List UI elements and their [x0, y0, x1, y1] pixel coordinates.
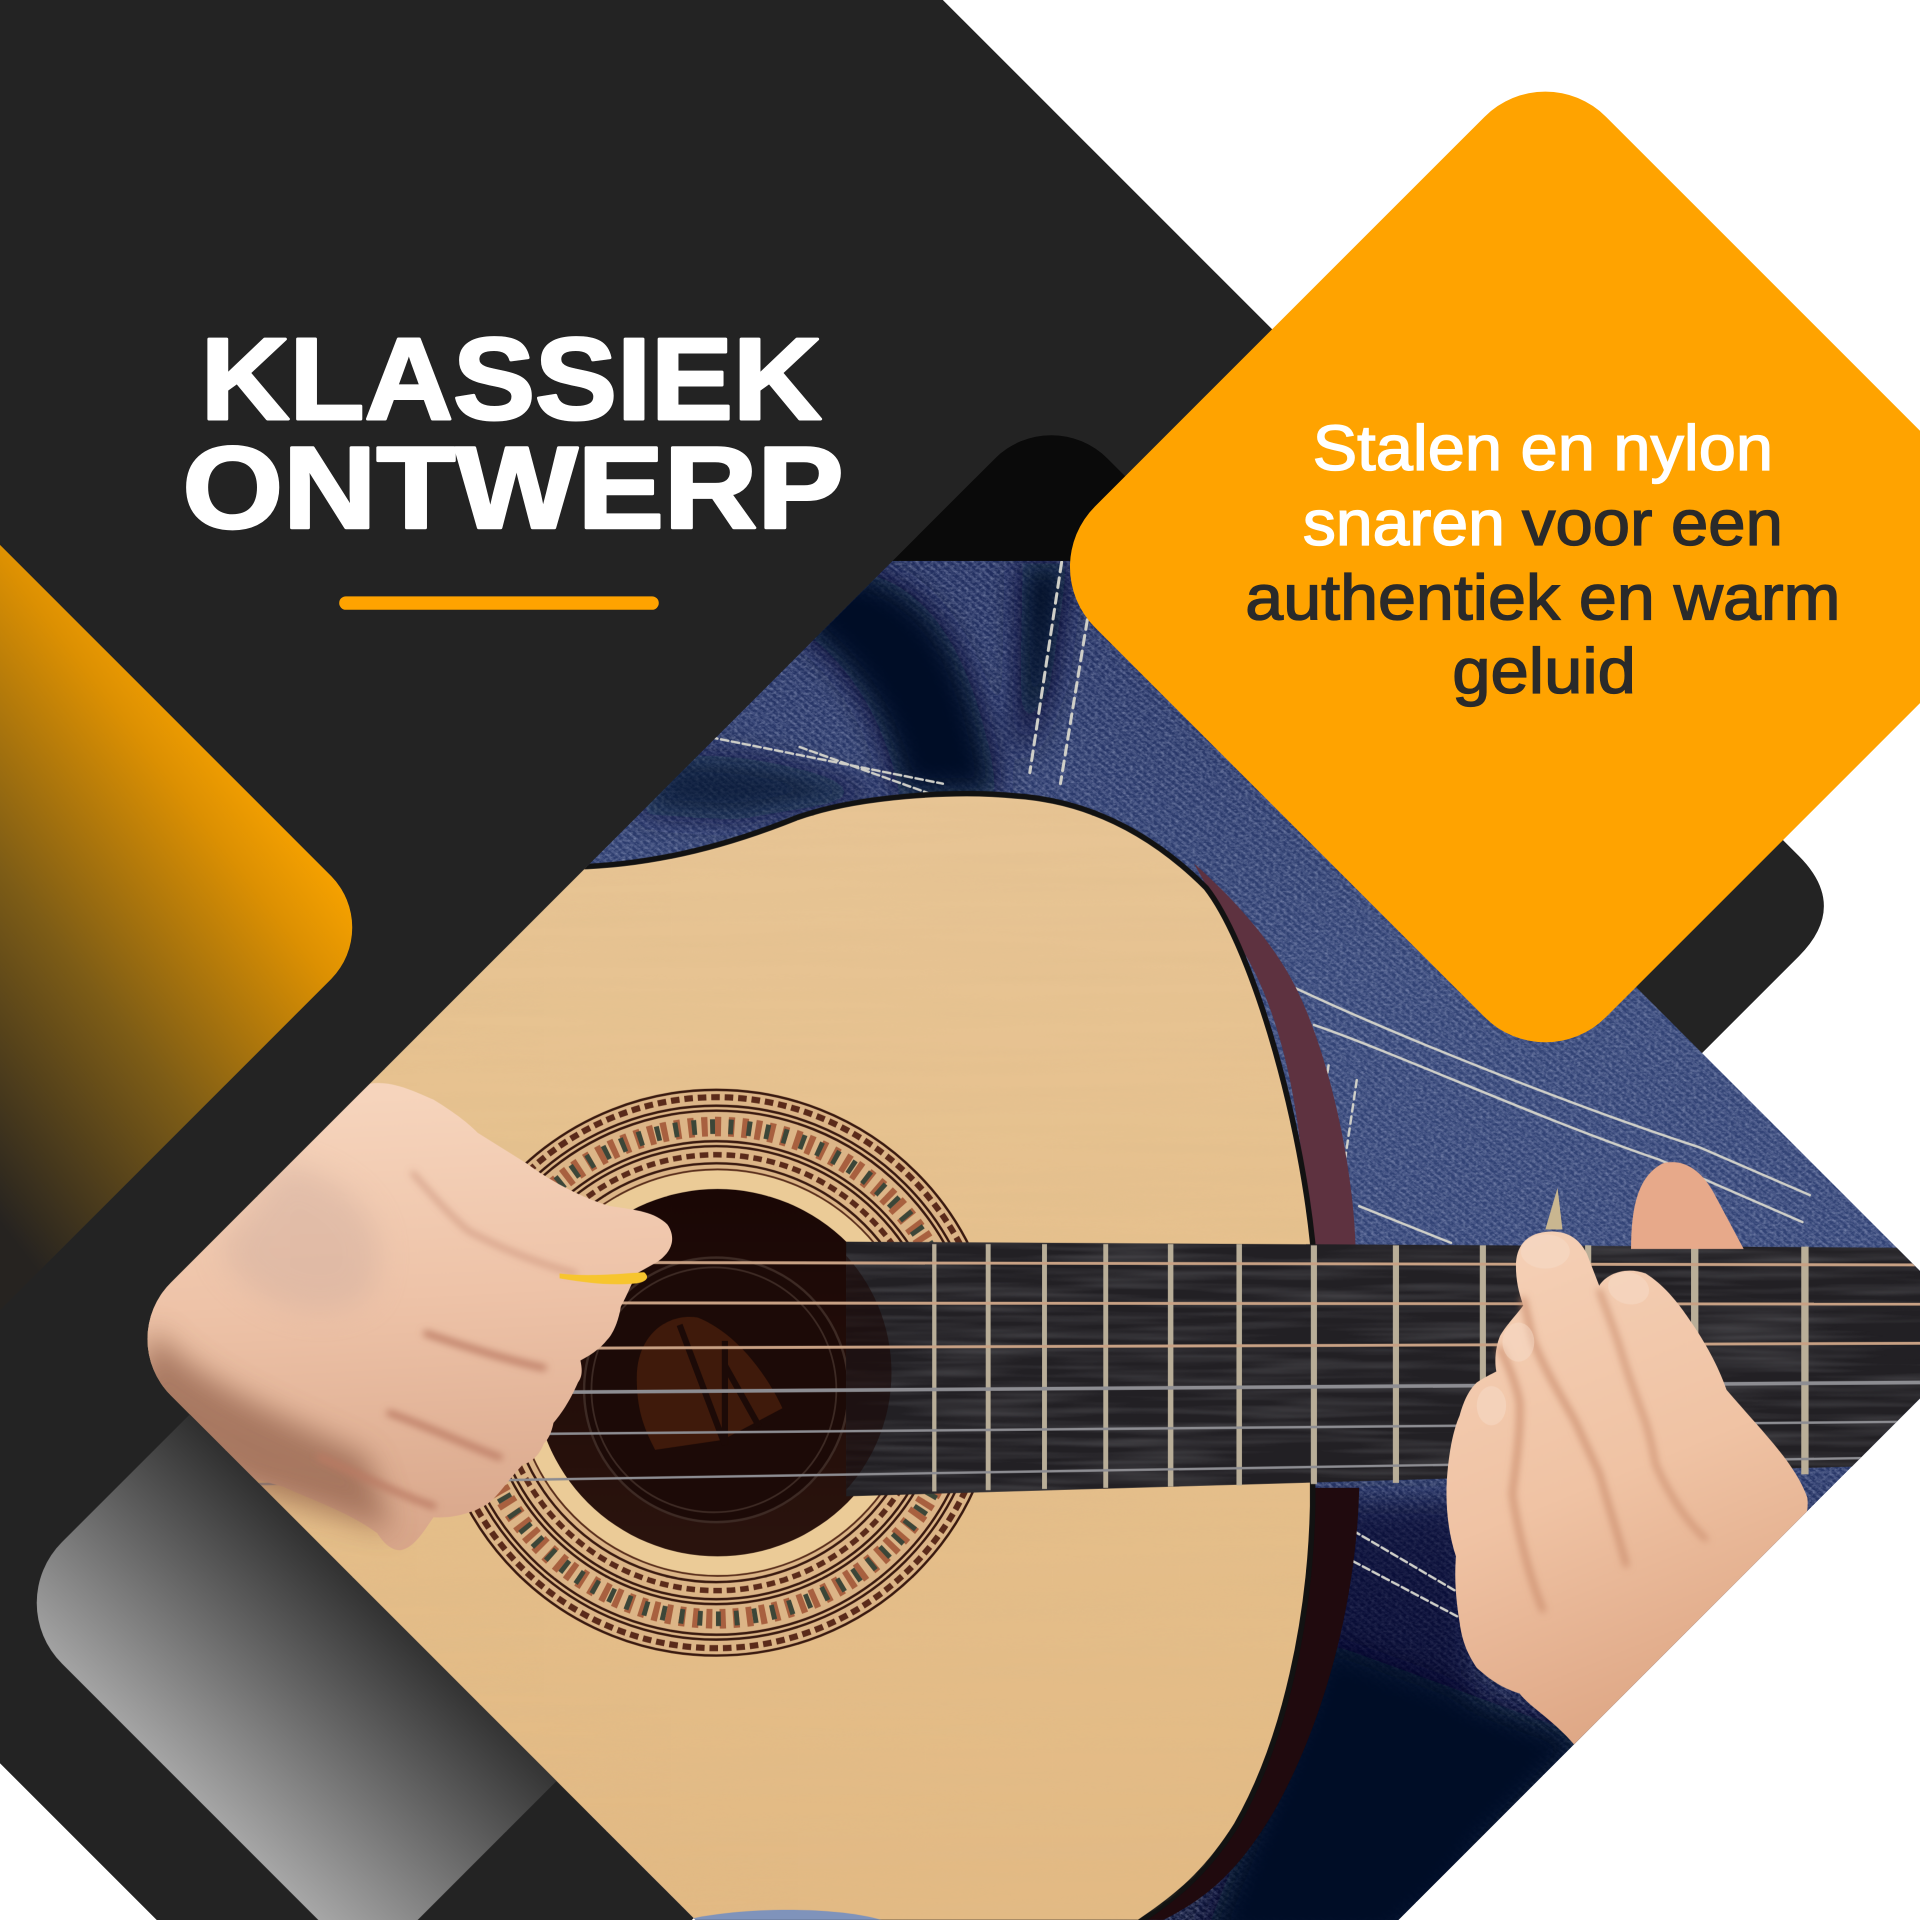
- fretboard: [846, 1242, 1920, 1496]
- fretting hand: [1446, 1162, 1808, 1751]
- grey gradient diamond: [37, 1414, 557, 1920]
- guitar body top: [73, 794, 1313, 1920]
- callout text: authentiek en warm: [1245, 563, 1840, 634]
- orange gradient diamond left: [0, 545, 352, 1310]
- denim weave: [588, 561, 1920, 1920]
- guitar side lower: [1102, 1488, 1359, 1920]
- title underline: [339, 596, 659, 610]
- finger creases: [320, 1173, 576, 1506]
- thumb: [1631, 1162, 1744, 1249]
- orange callout panel: [1034, 56, 1920, 1078]
- fretboard grain: [846, 1242, 1920, 1496]
- fingernails: [1477, 1234, 1653, 1425]
- denim folds: [637, 563, 1592, 1920]
- rosette: [469, 1088, 974, 1657]
- hand shape: [98, 1083, 672, 1550]
- denim below guitar: [686, 1910, 882, 1920]
- denim jacket: [588, 561, 1920, 1920]
- black apex of photo frame: [892, 435, 1125, 561]
- dark background panel: [0, 0, 1371, 1920]
- title: KLASSIEK: [201, 314, 822, 444]
- picking hand: [98, 1083, 672, 1550]
- title: ONTWERP: [182, 423, 844, 553]
- callout text: Stalen en nylon: [1313, 413, 1773, 484]
- strings: [257, 1262, 1920, 1484]
- callout text: snaren: [1303, 488, 1505, 559]
- soundhole seen through fretboard: [544, 1199, 891, 1547]
- wood grain: [1152, 1852, 1214, 1911]
- callout text: voor een: [1522, 488, 1783, 559]
- jacket thread: [1545, 1188, 1562, 1229]
- hand mottling: [220, 1163, 378, 1311]
- wrist shadow: [122, 1329, 392, 1531]
- denim stitching: [710, 562, 1810, 1616]
- pick: [560, 1272, 647, 1284]
- hand shape: [1446, 1231, 1808, 1751]
- soundhole ring: [532, 1168, 881, 1577]
- guitar side upper: [1194, 863, 1356, 1247]
- callout text: [1245, 413, 1840, 707]
- photo: guitar player: [73, 392, 1920, 1920]
- frets: [934, 1244, 1805, 1491]
- callout text: geluid: [1452, 636, 1636, 707]
- finger creases: [1500, 1291, 1706, 1610]
- dark diamond behind callout: [1408, 649, 1824, 1114]
- inner label and logo: [584, 1258, 849, 1522]
- title: [182, 314, 844, 553]
- soundhole: [546, 1188, 854, 1556]
